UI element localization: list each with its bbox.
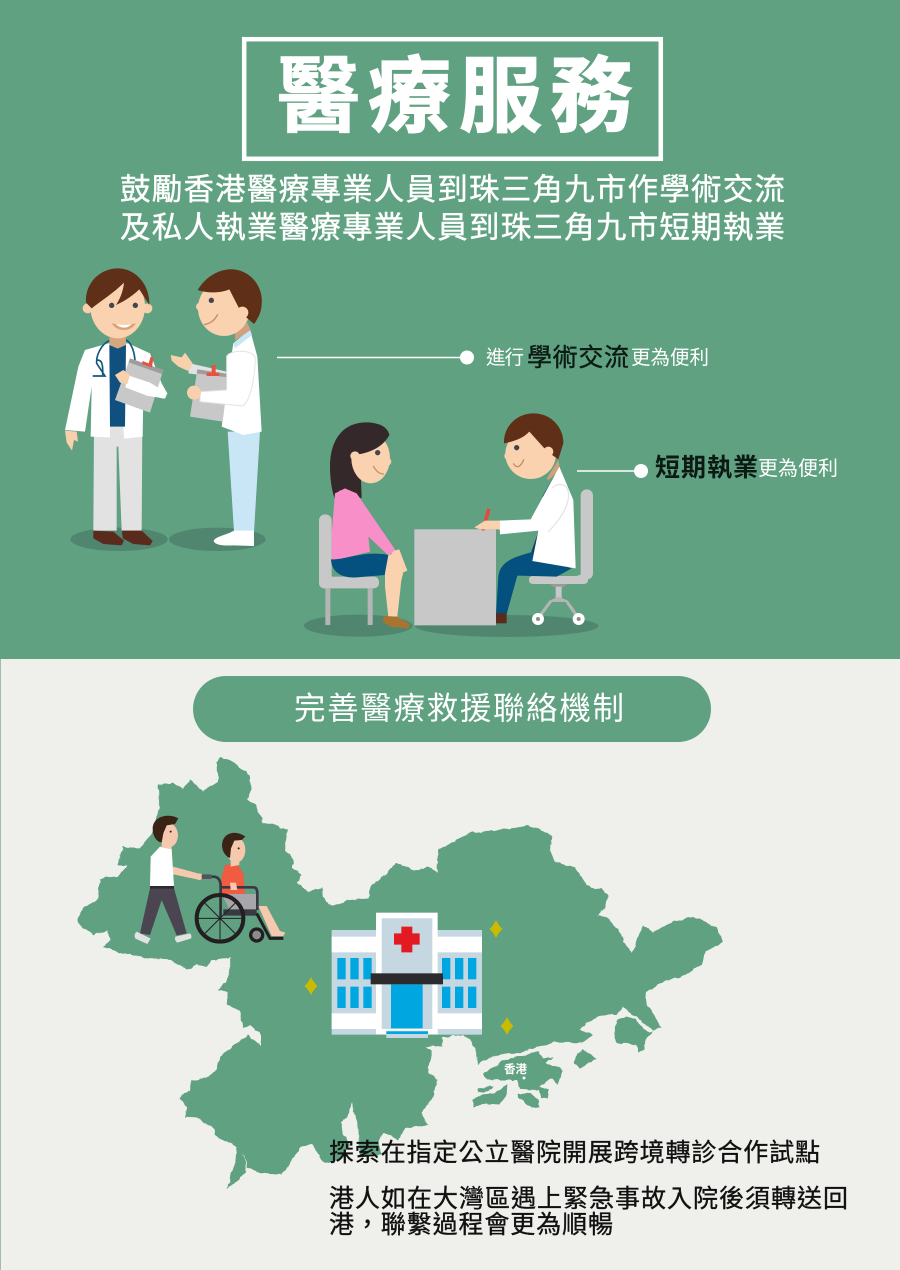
text: cross-boundary transfer pilot: 探索在指定公立醫院開展跨境轉診合作試點: [329, 1139, 820, 1167]
subtitle text: 鼓勵香港醫療專業人員到珠三角九市作學術交流: [120, 173, 785, 207]
callout: academic exchange: 更為便利: [631, 347, 709, 369]
patient chair: [319, 514, 379, 625]
map: Greater Bay Area: [77, 757, 723, 1188]
text: cross-boundary transfer pilot: 港人如在大灣區遇上緊急事故入院後須轉送回: [329, 1185, 848, 1213]
person pushing: [135, 816, 203, 944]
callout: academic exchange: [277, 344, 709, 372]
callout: short-term practice: 短期執業: [655, 454, 758, 482]
illustration: person pushing wheelchair: [135, 816, 285, 944]
doctor with stethoscope: [65, 268, 167, 545]
text: cross-boundary transfer pilot: 港，聯繫過程會更為順暢: [329, 1211, 613, 1239]
desk: [414, 529, 496, 625]
title box: [244, 39, 661, 159]
callout: academic exchange: 學術交流: [527, 344, 629, 372]
doctor seated: [474, 413, 576, 623]
icon: sparkle stars: [304, 920, 514, 1035]
doctor with clipboard: [171, 269, 262, 546]
illustration: patient consulting doctor at desk: [304, 413, 598, 637]
icon: hospital building: [332, 913, 482, 1038]
callout: academic exchange: 進行: [486, 347, 524, 369]
subtitle text: [120, 173, 785, 245]
callout: short-term practice: 更為便利: [758, 457, 838, 480]
map: Hong Kong and nearby islands: [473, 1016, 653, 1108]
section heading pill: 完善醫療救援聯絡機制: [294, 690, 624, 726]
label: Hong Kong: 香港: [504, 1062, 528, 1076]
section heading pill: [193, 676, 711, 742]
callout: short-term practice: [577, 454, 838, 482]
text: cross-boundary transfer pilot: [329, 1139, 848, 1239]
doctor chair: [529, 489, 593, 625]
title box: 醫療服務: [277, 50, 633, 143]
subtitle text: 及私人執業醫療專業人員到珠三角九市短期執業: [120, 211, 785, 245]
patient: [330, 422, 410, 628]
wheelchair and passenger: [197, 833, 285, 942]
label: Hong Kong: [504, 1062, 528, 1080]
illustration: two doctors talking: [65, 268, 266, 551]
